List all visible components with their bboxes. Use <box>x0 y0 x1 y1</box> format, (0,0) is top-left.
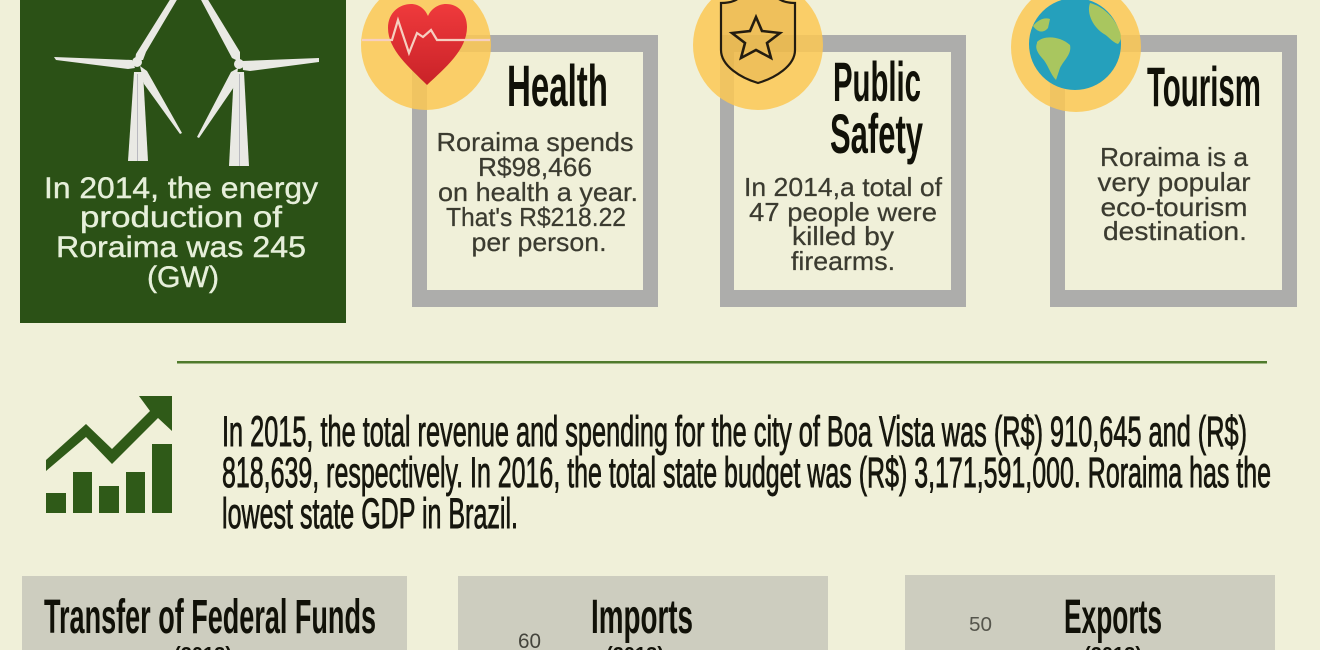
axis label: 50 <box>969 614 992 636</box>
tourism text: very popular <box>1098 167 1251 197</box>
heading: imports: Imports <box>591 591 693 644</box>
icon: wind turbines <box>54 0 319 166</box>
heading: exports: Exports <box>1064 591 1162 644</box>
public safety text <box>744 172 943 276</box>
panel: exports <box>905 575 1275 650</box>
health text: R$98,466 <box>478 152 592 182</box>
health text: That's R$218.22 <box>446 202 626 232</box>
panel: tourism <box>1011 0 1297 307</box>
public safety text: firearms. <box>791 246 895 276</box>
revenue and spending text: lowest state GDP in Brazil. <box>222 490 518 538</box>
energy text: production of <box>80 201 283 234</box>
energy text: (GW) <box>147 261 219 294</box>
icon: heart on yellow circle <box>361 0 491 110</box>
tourism text <box>1098 142 1251 246</box>
panel: health <box>361 0 658 307</box>
panel: energy production <box>20 0 346 323</box>
heading: public safety <box>830 50 923 165</box>
tourism text: Roraima is a <box>1100 142 1249 172</box>
icon: globe on yellow circle <box>1011 0 1141 112</box>
public safety text: 47 people were <box>749 197 937 227</box>
heading: public safety: Safety <box>830 102 923 165</box>
health text: per person. <box>472 227 606 257</box>
health text: Roraima spends <box>436 127 634 157</box>
public safety text: In 2014,a total of <box>744 172 943 202</box>
heading: transfer of federal funds: Transfer of Federal Funds <box>44 591 376 644</box>
heading: public safety: Public <box>833 50 921 113</box>
panel: public safety <box>693 0 966 307</box>
health text: on health a year. <box>438 177 638 207</box>
energy text: In 2014, the energy <box>44 172 318 205</box>
health text <box>436 127 638 257</box>
energy text: Roraima was 245 <box>56 231 306 264</box>
icon: growth chart <box>46 396 172 513</box>
public safety text: killed by <box>792 221 894 251</box>
icon: shield on yellow circle <box>693 0 823 110</box>
panel: imports <box>458 576 828 650</box>
heading: health: Health <box>507 54 608 119</box>
energy text <box>44 172 318 294</box>
tourism text: destination. <box>1103 216 1247 246</box>
tourism text: eco-tourism <box>1100 192 1248 222</box>
panel: transfer of federal funds <box>22 576 407 650</box>
revenue and spending text <box>222 408 1271 538</box>
